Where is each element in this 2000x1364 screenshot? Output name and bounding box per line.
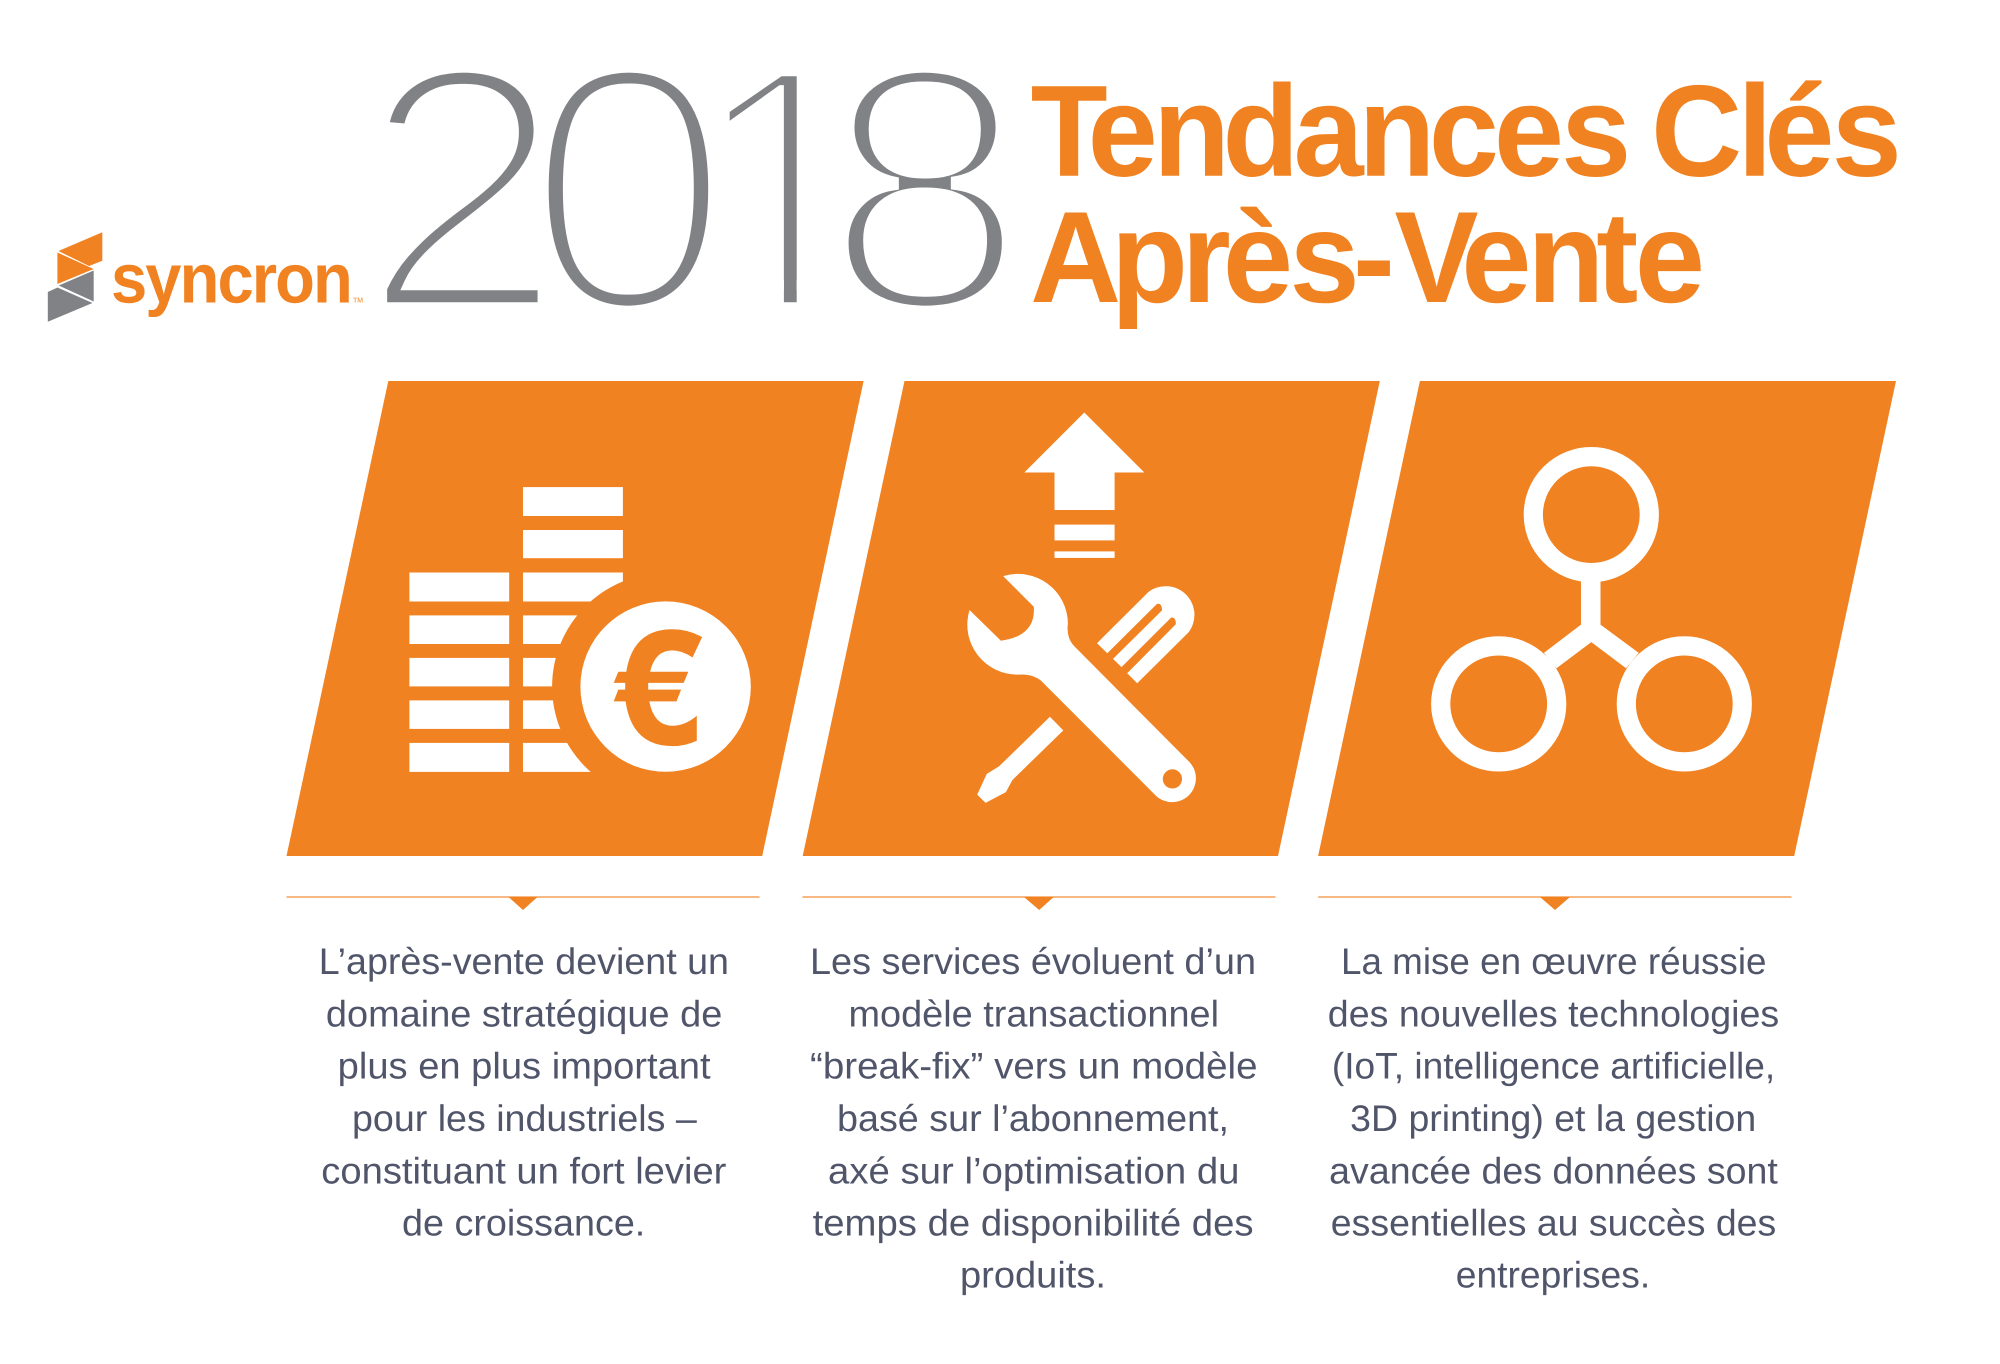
text block 3: 3D printing) et la gestion [1350,1098,1756,1139]
text block 3 [1328,941,1779,1296]
panel: tools [803,381,1380,856]
logo wordmark: syncron [111,239,353,317]
text block 3: avancée des données sont [1329,1150,1779,1191]
year: 2018: 0 [525,0,732,383]
logo: syncron [48,232,363,322]
text block 1: L’après-vente devient un [319,941,729,982]
year: 2018: 1 [687,0,881,383]
icon: up arrow [1024,412,1144,558]
text block 1 [319,941,729,1243]
text block 2: axé sur l’optimisation du [828,1150,1240,1191]
icon: coin stacks with euro [409,487,779,800]
title: Tendances Clés Après-Vente: Tendances Clés [1031,58,1902,204]
icon: syncron mark [48,232,102,322]
year: 2018: 8 [823,0,1027,383]
text block 1: plus en plus important [338,1046,711,1087]
text block 1: domaine stratégique de [326,994,722,1034]
title: Tendances Clés Après-Vente [1030,58,1902,330]
text block 2: Les services évoluent d’un [810,941,1256,982]
text block 1: de croissance. [402,1202,645,1243]
text block 3: des nouvelles technologies [1328,994,1779,1034]
text block 3: essentielles au succès des [1331,1202,1776,1243]
text block 2: modèle transactionnel [848,994,1219,1034]
text block 2: basé sur l’abonnement, [837,1098,1229,1139]
divider with pointer 1 [286,896,760,910]
title: Tendances Clés Après-Vente: Après-Vente [1030,184,1705,330]
text block 2: produits. [960,1255,1106,1296]
icon: wrench and screwdriver [967,574,1196,803]
trademark: TM [353,297,363,304]
text block 3: La mise en œuvre réussie [1341,941,1766,982]
panel: network [1318,381,1896,856]
text block 2: “break-fix” vers un modèle [810,1046,1258,1087]
divider with pointer 3 [1318,896,1792,910]
year: 2018: 2 [359,0,566,383]
text block 3: entreprises. [1456,1255,1650,1296]
text block 2: temps de disponibilité des [813,1202,1254,1243]
text block 1: pour les industriels – [352,1098,697,1139]
icon: connected circles [1441,457,1742,762]
text block 2 [810,941,1258,1296]
year: 2018 [359,0,1027,383]
panel: euro coins [286,381,864,856]
text block 1: constituant un fort levier [321,1150,726,1191]
divider with pointer 2 [802,896,1276,910]
text block 3: (IoT, intelligence artificielle, [1332,1046,1775,1087]
